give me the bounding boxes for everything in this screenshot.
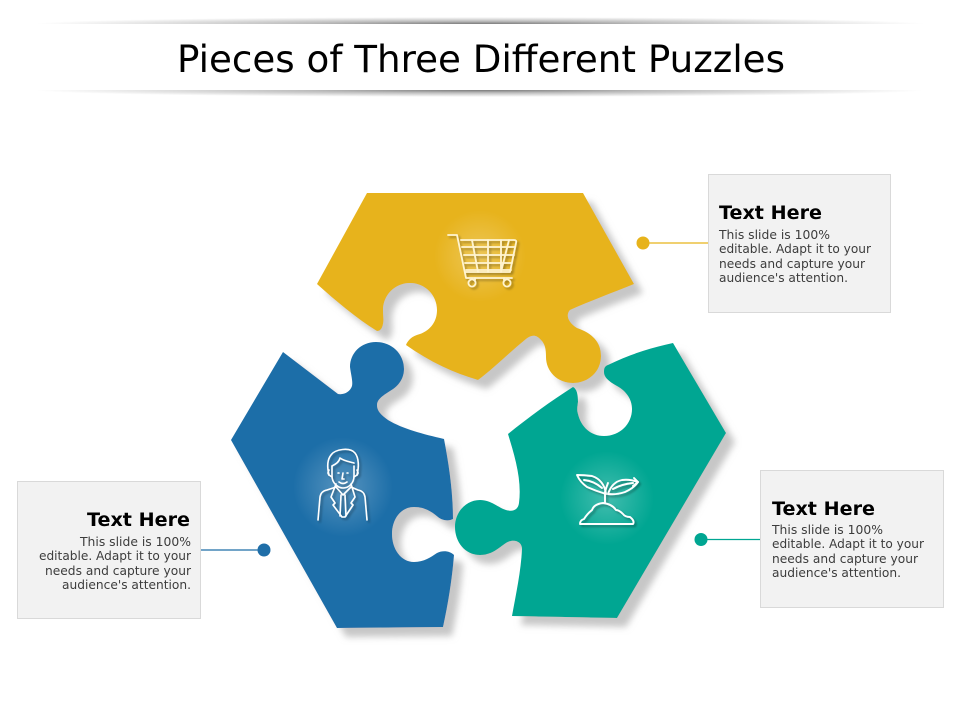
icon: businessman (318, 449, 367, 520)
text panel: top right (708, 174, 890, 312)
text panel: right: needs and capture your (772, 552, 918, 566)
text panel: top right: editable. Adapt it to your (719, 242, 871, 256)
text panel: left (18, 482, 200, 618)
icon glow: teal (560, 451, 654, 545)
text panel: top right: This slide is 100% (718, 228, 830, 242)
puzzle piece: teal (455, 343, 726, 618)
text panel: left: editable. Adapt it to your (39, 549, 191, 563)
icon: sprout (577, 475, 638, 524)
text panel: left: This slide is 100% (79, 535, 191, 549)
header rule: bottom (68, 90, 892, 96)
text panel: right: This slide is 100% (771, 523, 883, 537)
icon: shopping cart (448, 235, 516, 287)
text panel: top right: Text Here (719, 203, 822, 224)
text panel: left: needs and capture your (45, 564, 191, 578)
puzzle piece: blue (231, 342, 454, 628)
text panel: right (760, 470, 944, 608)
text panel: right: Text Here (772, 499, 875, 520)
text panel: top right: audience's attention. (719, 271, 848, 285)
title: Pieces of Three Different Puzzles (177, 38, 785, 81)
text panel: left: Text Here (87, 510, 190, 531)
icon glow: blue (293, 437, 393, 537)
text panel: left: audience's attention. (62, 578, 191, 592)
puzzle piece: yellow (317, 193, 634, 383)
icon glow: yellow (434, 210, 526, 302)
text panel: top right: needs and capture your (719, 257, 865, 271)
text panel: right: audience's attention. (772, 566, 901, 580)
header rule: top (70, 18, 891, 24)
callout connector: blue (201, 544, 270, 556)
callout connector: teal (694, 533, 760, 546)
text panel: right: editable. Adapt it to your (772, 537, 924, 551)
callout connector: yellow (636, 236, 708, 250)
